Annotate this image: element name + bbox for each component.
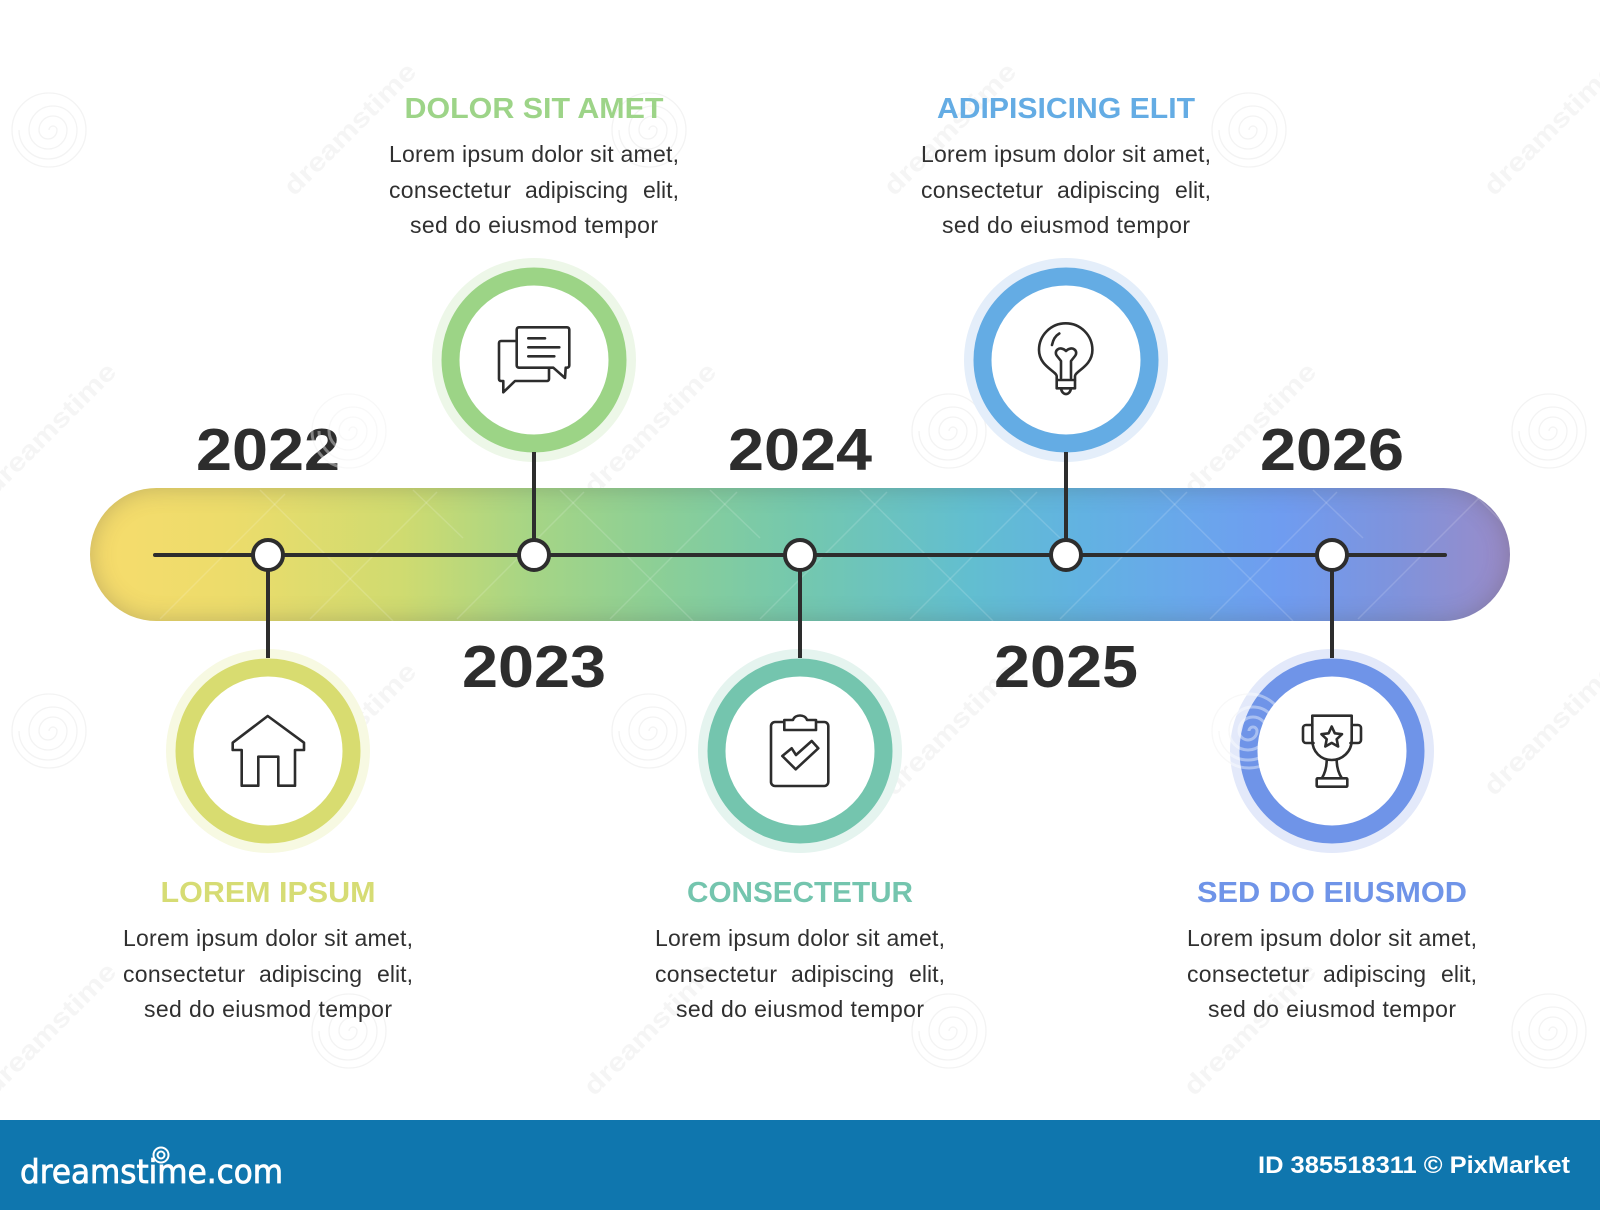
heading: Dolor Sit Amet: DOLOR SIT AMET <box>404 93 664 125</box>
text block: Sed Do Eiusmod: sed do eiusmod tempor <box>1208 996 1456 1022</box>
footer image id: ID 385518311 © PixMarket <box>1258 1152 1570 1179</box>
text block: Lorem Ipsum: adipiscing <box>259 961 362 987</box>
text block: Dolor Sit Amet: sed do eiusmod tempor <box>410 212 658 238</box>
text block: Consectetur: elit, <box>909 961 945 987</box>
text block: Sed Do Eiusmod: adipiscing <box>1323 961 1426 987</box>
text block: Adipisicing Elit: adipiscing <box>1057 177 1160 203</box>
year 2022: 2022 <box>196 417 340 483</box>
text: dreamstime <box>277 656 422 801</box>
year 2025: 2025 <box>994 634 1138 700</box>
icon: chat bubbles <box>499 327 569 392</box>
year 2023: 2023 <box>462 634 606 700</box>
text block: Dolor Sit Amet: consectetur <box>389 177 511 203</box>
text: dreamstime <box>1177 356 1322 501</box>
heading: Adipisicing Elit: ADIPISICING ELIT <box>937 93 1195 125</box>
timeline nodes <box>253 540 1347 570</box>
year 2024: 2024 <box>728 417 872 483</box>
step 2022: circle with house icon <box>166 649 370 853</box>
text block: Consectetur <box>655 925 945 1022</box>
text block: Consectetur: sed do eiusmod tempor <box>676 996 924 1022</box>
text block: Adipisicing Elit: sed do eiusmod tempor <box>942 212 1190 238</box>
text block: Adipisicing Elit: consectetur <box>921 177 1043 203</box>
text block: Lorem Ipsum <box>123 925 413 1022</box>
text: dreamstime <box>1477 56 1600 201</box>
text: dreamstime <box>277 56 422 201</box>
icon: clipboard checklist <box>771 716 828 786</box>
text block: Dolor Sit Amet <box>389 141 679 238</box>
step 2024: circle with clipboard icon <box>698 649 902 853</box>
text: dreamstime <box>877 56 1022 201</box>
step 2025: circle with light bulb icon <box>964 258 1168 462</box>
footer logo text: dreamstime.com <box>20 1152 283 1191</box>
heading: Sed Do Eiusmod: SED DO EIUSMOD <box>1197 877 1467 909</box>
step 2023: circle with chat icon <box>432 258 636 462</box>
text block: Lorem Ipsum: elit, <box>377 961 413 987</box>
text: dreamstime <box>577 956 722 1101</box>
heading: Lorem Ipsum: LOREM IPSUM <box>160 877 376 909</box>
text block: Adipisicing Elit <box>921 141 1211 238</box>
icon: light bulb <box>1039 323 1092 394</box>
text block: Consectetur: consectetur <box>655 961 777 987</box>
text block: Dolor Sit Amet: Lorem ipsum dolor sit amet, <box>389 141 679 167</box>
icon: logo spiral <box>154 1148 168 1162</box>
year 2026: 2026 <box>1260 417 1404 483</box>
text block: Dolor Sit Amet: elit, <box>643 177 679 203</box>
text: dreamstime <box>577 356 722 501</box>
text block: Sed Do Eiusmod: elit, <box>1441 961 1477 987</box>
text block: Consectetur: Lorem ipsum dolor sit amet, <box>655 925 945 951</box>
footer band <box>0 1120 1600 1210</box>
text block: Lorem Ipsum: Lorem ipsum dolor sit amet, <box>123 925 413 951</box>
text: dreamstime <box>1477 656 1600 801</box>
text: dreamstime <box>1177 956 1322 1101</box>
icon: trophy <box>1303 716 1361 787</box>
text block: Sed Do Eiusmod: Lorem ipsum dolor sit amet, <box>1187 925 1477 951</box>
text block: Sed Do Eiusmod: consectetur <box>1187 961 1309 987</box>
text block: Sed Do Eiusmod <box>1187 925 1477 1022</box>
text block: Dolor Sit Amet: adipiscing <box>525 177 628 203</box>
timeline gradient bar <box>90 488 1510 621</box>
text block: Lorem Ipsum: consectetur <box>123 961 245 987</box>
step 2026: circle with trophy icon <box>1230 649 1434 853</box>
text block: Adipisicing Elit: elit, <box>1175 177 1211 203</box>
icon: house <box>233 716 304 786</box>
text block: Consectetur: adipiscing <box>791 961 894 987</box>
text block: Adipisicing Elit: Lorem ipsum dolor sit amet, <box>921 141 1211 167</box>
text: dreamstime <box>877 656 1022 801</box>
text block: Lorem Ipsum: sed do eiusmod tempor <box>144 996 392 1022</box>
heading: Consectetur: CONSECTETUR <box>687 877 913 909</box>
timeline axis with connectors <box>155 452 1445 658</box>
